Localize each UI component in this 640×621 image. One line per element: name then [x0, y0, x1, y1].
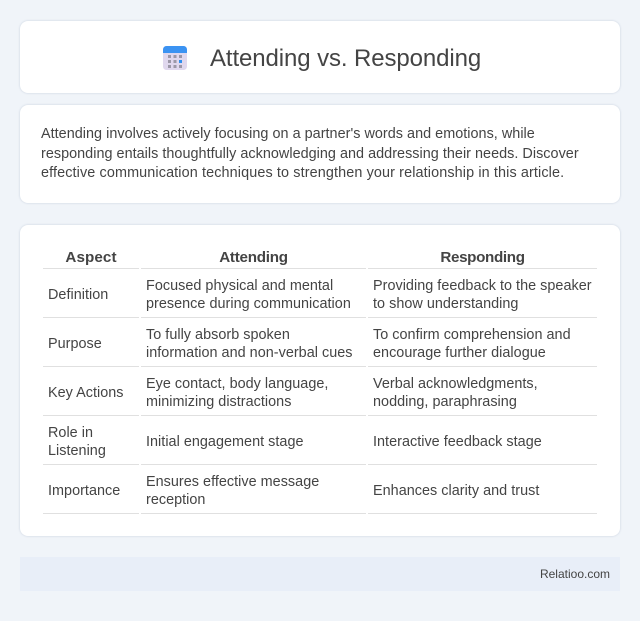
cell: Importance, Attending: Ensures effective message [146, 474, 319, 490]
cell: Purpose, Attending: information and non-verbal cues [146, 345, 353, 361]
row label: Importance: Importance [48, 483, 120, 499]
text block: introduction: responding entails thoughtfully acknowledging and addressing their needs. Discover [41, 146, 579, 162]
cell: Definition, Attending: presence during communication [146, 296, 351, 312]
row label: Role in Listening: Role in [48, 425, 93, 441]
cell: Definition, Attending: Focused physical and mental [146, 278, 333, 294]
cell: Key Actions, Attending: Eye contact, body language, [146, 376, 328, 392]
cell: Purpose, Responding: To confirm comprehension and [373, 327, 571, 343]
row label: Role in Listening: Listening [48, 443, 106, 459]
cell: Role in Listening, Attending: Initial engagement stage [146, 434, 304, 450]
cell: Importance, Responding: Enhances clarity and trust [373, 483, 539, 499]
cell: Key Actions, Responding: Verbal acknowledgments, [373, 376, 538, 392]
cell: Purpose, Responding [373, 327, 571, 361]
panel: title card [20, 21, 620, 93]
cell: Key Actions, Responding: nodding, paraphrasing [373, 394, 517, 410]
text block: introduction: effective communication techniques to strengthen your relationship in this article. [41, 165, 564, 181]
cell: Purpose, Responding: encourage further dialogue [373, 345, 546, 361]
cell: Key Actions, Attending [146, 376, 328, 410]
text block: introduction [41, 126, 579, 181]
panel: introduction [20, 105, 620, 203]
cell: Definition, Attending [146, 278, 351, 312]
cell: Purpose, Attending [146, 327, 353, 361]
cell: Role in Listening, Responding: Interactive feedback stage [373, 434, 542, 450]
row label: Definition: Definition [48, 287, 108, 303]
column header: Responding: Responding [440, 249, 525, 266]
cell: Importance, Attending [146, 474, 319, 508]
icon: calendar [163, 46, 187, 70]
cell: Key Actions, Attending: minimizing distractions [146, 394, 291, 410]
text block: introduction: Attending involves actively focusing on a partner's words and emotions, while [41, 126, 535, 142]
title: Attending vs. Responding [210, 45, 481, 72]
row label: Role in Listening [48, 425, 106, 459]
row label: Key Actions: Key Actions [48, 385, 124, 401]
row label: Purpose: Purpose [48, 336, 102, 352]
column header: Attending: Attending [219, 249, 288, 266]
cell: Purpose, Attending: To fully absorb spoken [146, 327, 290, 343]
cell: Key Actions, Responding [373, 376, 538, 410]
footer bar [20, 557, 620, 591]
panel: comparison table card [20, 225, 620, 536]
cell: Definition, Responding: to show understanding [373, 296, 518, 312]
column header: Aspect: Aspect [65, 249, 117, 266]
footer text: Relatioo.com: Relatioo.com [540, 567, 610, 581]
cell: Definition, Responding [373, 278, 592, 312]
cell: Importance, Attending: reception [146, 492, 205, 508]
cell: Definition, Responding: Providing feedback to the speaker [373, 278, 592, 294]
